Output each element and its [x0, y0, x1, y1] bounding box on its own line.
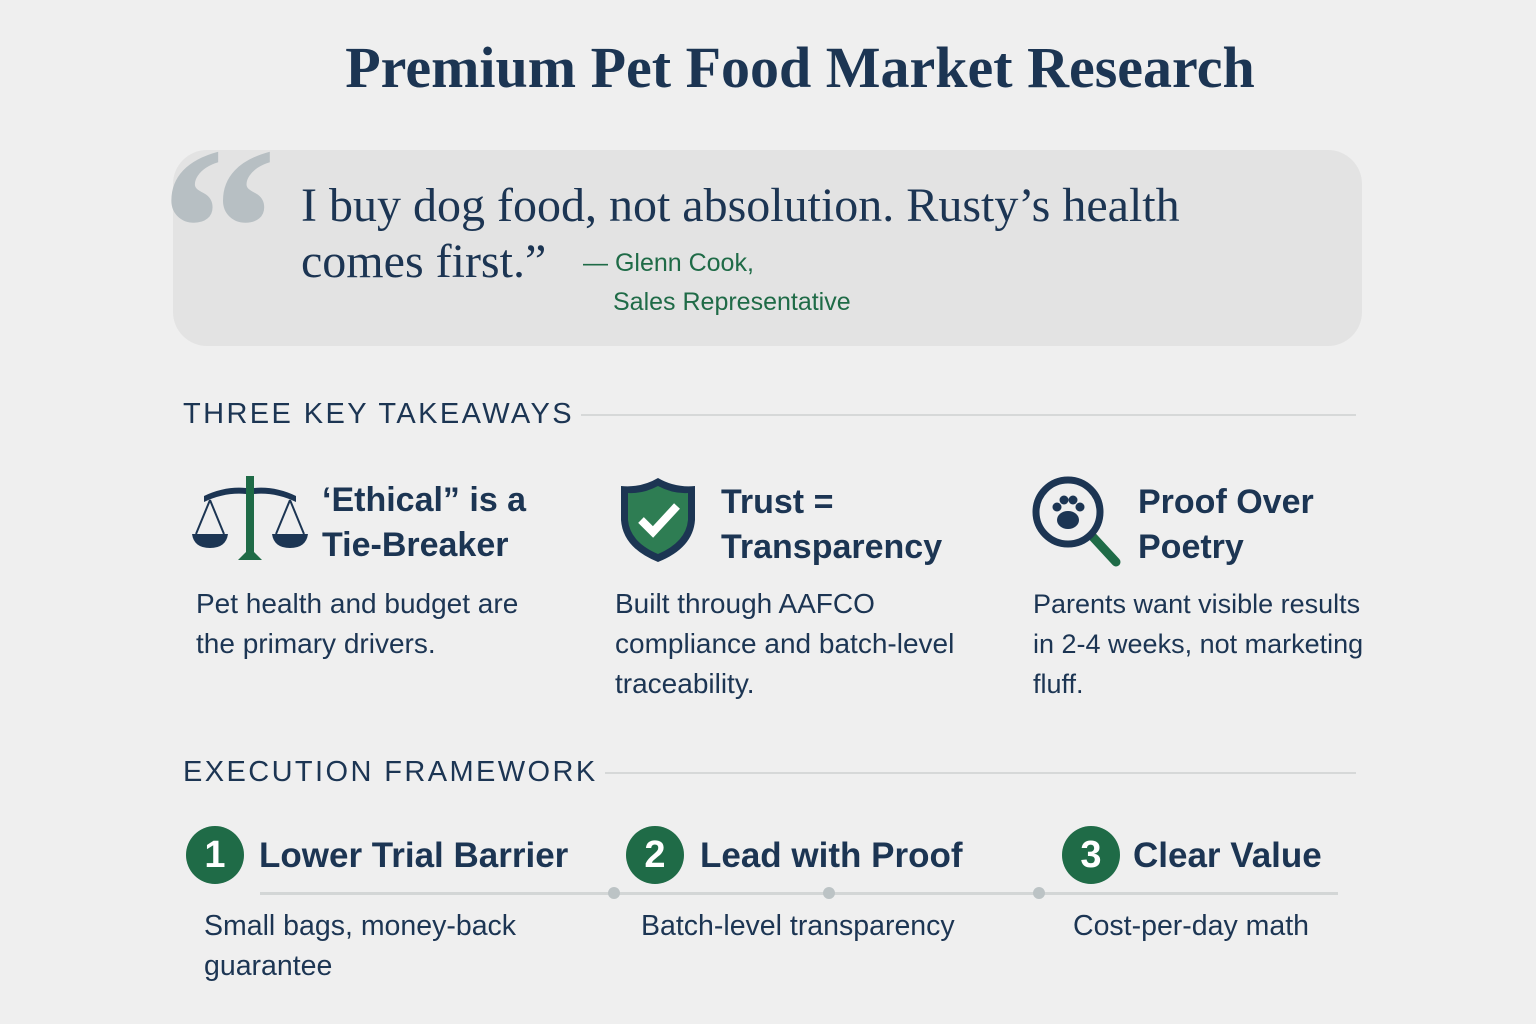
body	[615, 588, 954, 699]
heading: Trust =	[721, 483, 833, 521]
panel: takeaway 3	[1032, 476, 1363, 699]
quote panel	[173, 150, 1362, 346]
step 3: 3	[1080, 834, 1102, 876]
heading: Proof Over	[1138, 483, 1314, 521]
title: Premium Pet Food Market Research	[345, 35, 1255, 100]
step 2: Lead with Proof	[700, 836, 962, 875]
connector line	[260, 892, 1338, 895]
quote text: comes first.”	[301, 235, 546, 288]
step 1: guarantee	[204, 950, 332, 982]
heading: Transparency	[721, 528, 942, 566]
icon: shield	[621, 478, 695, 562]
body	[196, 588, 518, 659]
step 1: Lower Trial Barrier	[259, 836, 568, 875]
body: the primary drivers.	[196, 628, 436, 659]
attribution: Sales Representative	[613, 288, 851, 316]
attribution	[583, 249, 851, 316]
body: Pet health and budget are	[196, 588, 518, 619]
step 1: Small bags, money-back	[204, 910, 516, 942]
step 2	[626, 826, 963, 942]
heading: ‘Ethical” is a	[322, 481, 526, 519]
heading	[1138, 483, 1314, 566]
section heading: takeaways: THREE KEY TAKEAWAYS	[183, 398, 574, 430]
step 1: 1	[204, 834, 226, 876]
step 2: Batch-level transparency	[641, 910, 955, 942]
attribution: — Glenn Cook,	[583, 249, 754, 277]
step 2: 2	[644, 834, 666, 876]
body: Built through AAFCO	[615, 588, 875, 619]
body: Parents want visible results	[1033, 589, 1360, 619]
quote text	[301, 179, 1180, 288]
body: in 2-4 weeks, not marketing	[1033, 629, 1363, 659]
body: compliance and batch-level	[615, 628, 954, 659]
heading: Tie-Breaker	[322, 526, 508, 564]
heading	[322, 481, 526, 564]
section heading: execution: EXECUTION FRAMEWORK	[183, 756, 598, 788]
dots	[608, 887, 620, 899]
icon: magnifier paw	[1032, 476, 1120, 566]
panel: takeaway 1	[192, 476, 526, 659]
body: traceability.	[615, 668, 755, 699]
quote text: I buy dog food, not absolution. Rusty’s health	[301, 179, 1180, 232]
body	[1033, 589, 1363, 699]
heading: Poetry	[1138, 528, 1244, 566]
step 1	[186, 826, 568, 982]
step 3	[1062, 826, 1322, 942]
icon: quote mark: “	[160, 99, 278, 359]
heading	[721, 483, 942, 566]
step 3: Cost-per-day math	[1073, 910, 1309, 942]
step 3: Clear Value	[1133, 836, 1322, 875]
panel: takeaway 2	[615, 478, 954, 699]
icon: scales	[192, 476, 308, 560]
body: fluff.	[1033, 669, 1084, 699]
